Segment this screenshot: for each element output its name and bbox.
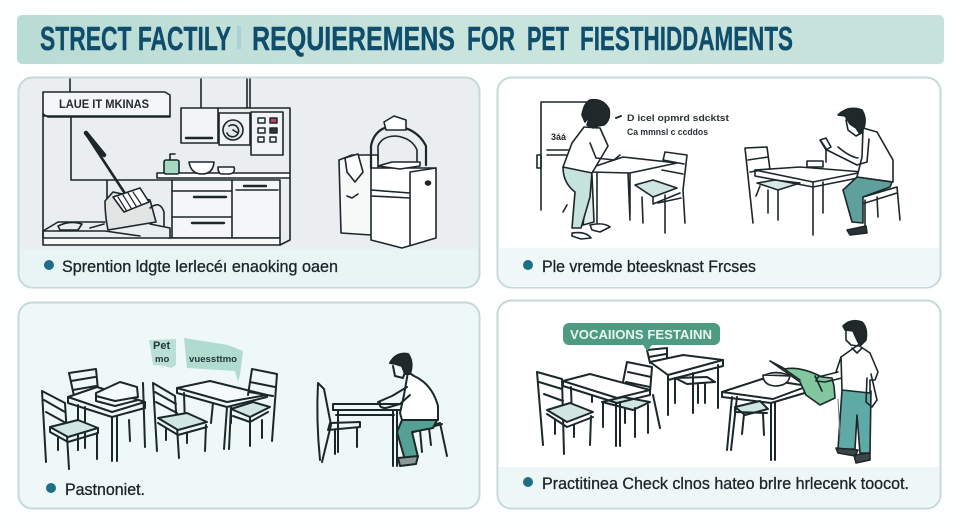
appliance: washing machine <box>339 116 436 248</box>
speech bubble small: mo <box>155 354 169 365</box>
caption text: Sprention ldgte lerlecéı enaoking oaen <box>62 258 338 276</box>
speech bubble large <box>184 338 243 382</box>
caption bullet <box>523 477 533 487</box>
caption text: Practitinea Check clnos hateo brlre hrlecenk toocot. <box>542 475 909 493</box>
caption bullet <box>46 483 56 493</box>
speech note: Ca mmnsl c ccddos <box>627 127 708 138</box>
title banner <box>17 15 944 64</box>
panel: kitchen <box>18 78 480 288</box>
fridge: 3áá <box>551 132 567 142</box>
icon: panel buttons <box>258 118 277 142</box>
panel: seating layout <box>18 302 480 508</box>
speech bubble small <box>149 339 176 368</box>
green label tag: VOCAIIONS FESTAINN <box>570 327 712 342</box>
tables and chairs left <box>42 369 277 469</box>
fridge <box>537 102 590 210</box>
bowl on table <box>763 372 790 386</box>
panel: dining roles <box>498 78 940 288</box>
panel: vacation retain <box>498 300 940 508</box>
green label tag <box>563 323 720 351</box>
title text: REQUIEREMENS <box>252 20 455 57</box>
speech note: D icel opmrd sdcktst <box>627 113 730 124</box>
tables and chairs <box>537 348 808 460</box>
man reading at table <box>317 354 447 466</box>
kitchen illustration <box>43 79 290 245</box>
speech bubble large: vuessttmo <box>189 354 237 365</box>
caption bullet <box>44 260 54 270</box>
sign label: LAUE IT MKINAS <box>59 97 149 111</box>
title text: FOR <box>467 20 515 57</box>
caption text: Pastnoniet. <box>65 481 145 499</box>
speech note <box>627 113 730 138</box>
speech bubble small: Pet <box>153 340 170 352</box>
title text <box>40 20 793 57</box>
woman at table <box>563 100 687 239</box>
man at table with tablet <box>745 108 900 235</box>
title text: PET <box>527 20 569 57</box>
man with green cloth <box>770 321 878 463</box>
caption text: Ple vremde bteesknast Frcses <box>542 258 756 276</box>
title text: STRECT FACTILY <box>40 20 231 57</box>
title text: FIESTHIDDAMENTS <box>580 20 793 57</box>
caption bullet <box>523 260 533 270</box>
